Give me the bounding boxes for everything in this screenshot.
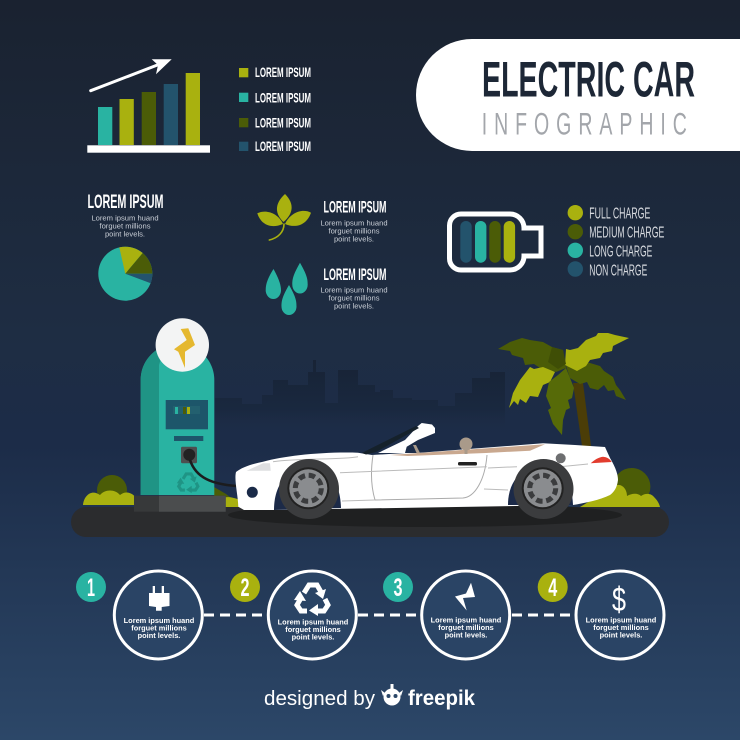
battery legend (568, 205, 664, 280)
number badge 3: 3 (394, 574, 402, 602)
step text: forguet millions (131, 624, 187, 632)
step text: point levels. (445, 630, 487, 640)
icon: leaves (257, 194, 311, 240)
bar chart legend: LOREM IPSUM (255, 138, 311, 154)
headlight (247, 463, 271, 471)
step 3 (383, 571, 510, 659)
icon: mascot (381, 684, 403, 706)
step text (124, 616, 195, 640)
leaf text: LOREM IPSUM (324, 198, 386, 217)
connector dashes (204, 614, 575, 616)
bar chart with arrow (87, 59, 210, 153)
step text (586, 616, 657, 640)
charging cable (190, 460, 236, 486)
step text: Lorem ipsum huand (124, 616, 195, 625)
number badge 1: 1 (87, 574, 95, 602)
icon: lightning badge (156, 318, 209, 372)
rear wheel (508, 459, 574, 519)
fuel cap (556, 453, 566, 463)
front wheel (274, 459, 341, 519)
step text: point levels. (600, 630, 642, 640)
step text: point levels. (138, 631, 180, 640)
drops text: LOREM IPSUM (324, 265, 386, 284)
station base (134, 496, 226, 512)
step text: point levels. (292, 632, 334, 642)
pie block heading: Lorem ipsum huand (91, 214, 159, 223)
tail light (591, 457, 612, 463)
number badge 2: 2 (240, 574, 250, 602)
step text: forguet millions (593, 623, 649, 632)
driver head (460, 438, 472, 454)
footer credit: freepik (408, 687, 475, 710)
step 4 (538, 571, 664, 659)
battery legend: MEDIUM CHARGE (589, 224, 664, 241)
step text: Lorem ipsum huand (431, 616, 502, 624)
title banner (416, 39, 740, 151)
bushes (83, 468, 660, 507)
drops text: forguet millions (328, 294, 380, 303)
pie block heading (88, 192, 164, 239)
bar chart legend: LOREM IPSUM (255, 89, 311, 105)
step text (431, 616, 502, 640)
palm tree (498, 333, 629, 446)
battery legend: FULL CHARGE (589, 205, 650, 222)
leaf text: forguet millions (328, 227, 380, 236)
step text: Lorem ipsum huand (586, 616, 657, 624)
pie block heading: forguet millions (99, 222, 151, 230)
fog lamp (247, 487, 258, 498)
car (235, 423, 618, 519)
bar chart legend: LOREM IPSUM (255, 64, 311, 80)
step text: Lorem ipsum huand (278, 618, 349, 626)
pie block heading: LOREM IPSUM (88, 192, 164, 213)
bar chart legend (239, 64, 311, 154)
drops text: Lorem ipsum huand (320, 286, 388, 295)
title banner: INFOGRAPHIC (482, 105, 687, 142)
car shadow (228, 503, 622, 527)
icon: lightning (455, 583, 475, 610)
icon: plug (149, 586, 170, 611)
seat back (413, 445, 420, 454)
icon: dollar: $ (612, 581, 626, 619)
drops text (320, 265, 388, 311)
icon: recycle (294, 585, 328, 616)
number badge 4: 4 (548, 574, 557, 602)
step 1 (76, 571, 202, 659)
pie chart (98, 247, 152, 301)
drops text: point levels. (334, 302, 374, 311)
footer credit (264, 684, 475, 710)
leaf text: Lorem ipsum huand (320, 219, 388, 228)
leaf text (320, 198, 388, 244)
socket and plug (181, 447, 197, 463)
battery legend: LONG CHARGE (589, 244, 652, 261)
step text: forguet millions (285, 625, 341, 634)
leaf text: point levels. (334, 235, 374, 244)
charging station (134, 318, 236, 512)
charging screen (166, 400, 208, 429)
interior trim (390, 444, 545, 456)
step text (278, 618, 349, 642)
pie block heading: point levels. (105, 230, 145, 239)
icon: water drops (266, 263, 308, 315)
step text: forguet millions (438, 623, 494, 632)
footer credit: designed by (264, 688, 375, 710)
icon: battery (450, 214, 541, 270)
road (71, 507, 669, 537)
step 2 (230, 571, 356, 659)
door outline (372, 455, 487, 500)
door handle (458, 462, 477, 466)
battery legend: NON CHARGE (589, 263, 647, 280)
recycle mark (177, 474, 198, 493)
bar chart legend: LOREM IPSUM (255, 115, 311, 131)
windscreen frame (362, 423, 435, 454)
city skyline (215, 360, 505, 430)
